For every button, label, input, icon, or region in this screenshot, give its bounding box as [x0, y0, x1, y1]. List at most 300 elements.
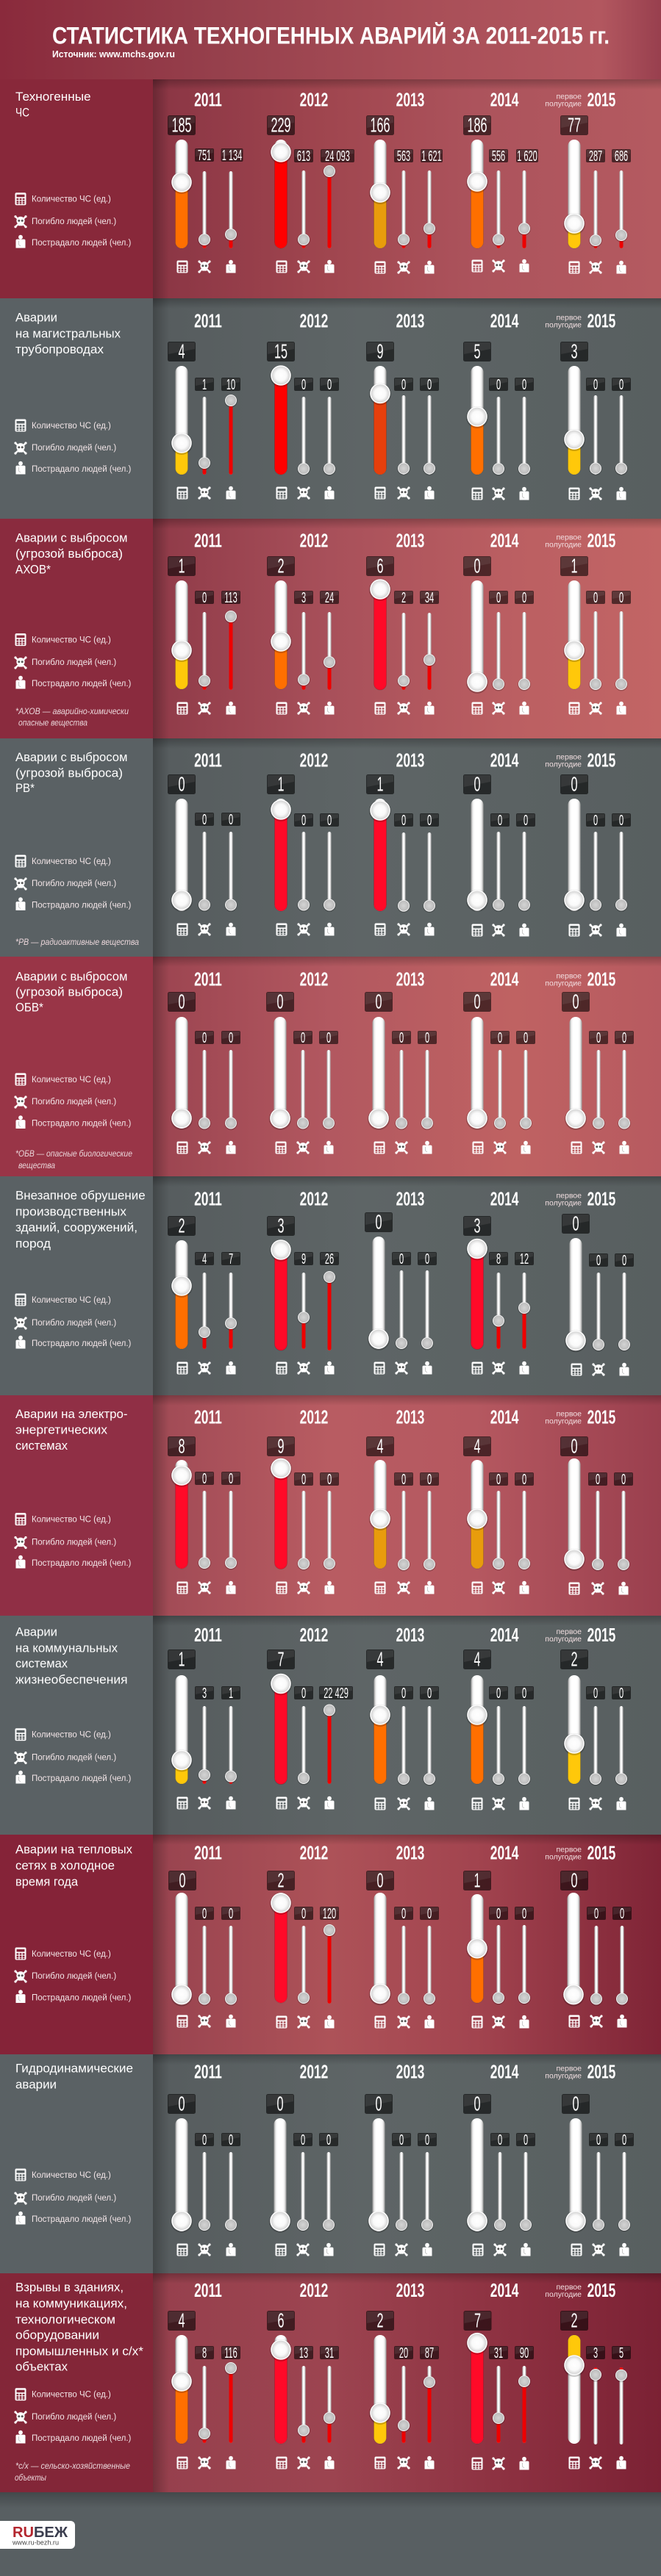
year: 2012	[300, 749, 328, 771]
count slider	[463, 1647, 491, 1784]
year: 2011	[194, 530, 222, 551]
heading	[15, 970, 128, 1014]
injured slider: 0	[522, 1685, 526, 1702]
group 2012	[267, 1625, 353, 1810]
period note: первое	[556, 1192, 582, 1201]
period note	[545, 93, 582, 109]
period note: полугодие	[545, 979, 582, 987]
count slider	[366, 1434, 394, 1569]
count slider	[168, 1434, 196, 1569]
count slider: 0	[276, 2092, 284, 2115]
year: 2013	[396, 1625, 424, 1646]
logo: RUБЕЖ	[12, 2525, 68, 2541]
icons row	[176, 260, 235, 273]
year: 2012	[300, 310, 328, 331]
panel: Взрывы в зданиях	[0, 2273, 661, 2492]
heading: энергетических	[15, 1424, 108, 1437]
period note: полугодие	[545, 760, 582, 769]
injured slider	[221, 1251, 240, 1349]
year: 2013	[396, 1842, 424, 1863]
legend: Погибло людей (чел.)	[32, 1319, 116, 1328]
group 2014	[463, 1625, 534, 1810]
icons row	[374, 2243, 432, 2256]
heading: (угрозой выброса)	[15, 986, 123, 999]
group 2013	[366, 749, 439, 936]
deaths slider: 287	[589, 148, 602, 165]
year: 2014	[490, 310, 519, 331]
heading: системах	[15, 1439, 68, 1453]
group 2015	[545, 1625, 631, 1810]
deaths slider	[195, 1030, 214, 1130]
deaths slider: 0	[202, 2132, 207, 2148]
year: 2012	[300, 1625, 328, 1646]
period note: полугодие	[545, 1199, 582, 1208]
deaths slider	[195, 2132, 214, 2232]
injured slider: 113	[224, 590, 237, 606]
year: 2013	[396, 968, 424, 990]
period note: первое	[556, 2065, 582, 2073]
deaths slider	[586, 590, 605, 691]
count slider: 2	[571, 1647, 578, 1671]
count slider: 1	[178, 1647, 185, 1671]
legend: Погибло людей (чел.)	[32, 2194, 116, 2203]
icons row	[375, 923, 434, 936]
year: 2014	[490, 1625, 519, 1646]
icons row	[472, 1797, 529, 1810]
icons row	[569, 1797, 626, 1810]
icons row	[569, 487, 626, 500]
icons row	[276, 260, 334, 273]
legend: Пострадало людей (чел.)	[32, 2434, 132, 2443]
year: 2012	[300, 530, 328, 551]
period note: полугодие	[545, 1635, 582, 1644]
deaths slider	[489, 1685, 508, 1785]
injured slider: 0	[524, 2132, 528, 2148]
injured slider: 12	[520, 1251, 529, 1267]
injured slider	[320, 590, 339, 690]
heading	[15, 90, 91, 119]
heading: (угрозой выброса)	[15, 547, 123, 561]
count slider: 0	[376, 1868, 384, 1892]
heading: РВ*	[15, 782, 35, 795]
count slider: 166	[370, 113, 390, 137]
group 2012	[267, 2280, 339, 2469]
legend: Пострадало людей (чел.)	[32, 1120, 132, 1129]
injured slider: 0	[619, 1685, 624, 1702]
injured slider: 22 429	[324, 1685, 349, 1702]
injured slider	[320, 1472, 339, 1571]
deaths slider: 3	[593, 2345, 598, 2361]
icons row	[176, 1141, 235, 1154]
count slider	[560, 339, 588, 475]
group 2015	[545, 2061, 634, 2256]
count slider: 1	[376, 772, 384, 796]
group 2013	[365, 968, 437, 1154]
panel: Аварии с выбросом РВ	[0, 738, 661, 957]
injured slider: 0	[326, 2132, 331, 2148]
panel: Аварии на магистральных трубопроводах	[0, 298, 661, 519]
year: 2014	[490, 968, 519, 990]
deaths slider	[394, 813, 413, 913]
deaths slider	[394, 1906, 413, 2006]
deaths slider	[294, 377, 313, 476]
deaths slider: 9	[301, 1251, 306, 1267]
count slider	[365, 990, 393, 1130]
group 2013	[365, 2061, 437, 2256]
heading: промышленных и с/х*	[15, 2345, 144, 2359]
count slider: 0	[178, 990, 185, 1013]
legend	[14, 419, 132, 475]
heading: Аварии	[15, 1625, 57, 1638]
year: 2011	[194, 89, 222, 110]
count slider	[463, 339, 491, 475]
count slider: 1	[474, 1868, 481, 1892]
injured slider	[612, 377, 631, 475]
group 2012	[267, 749, 339, 936]
panel: Внезапное обрушение	[0, 1176, 661, 1395]
injured slider	[420, 2345, 439, 2443]
injured slider	[615, 2132, 634, 2232]
deaths slider: 0	[498, 1030, 502, 1046]
deaths slider: 0	[594, 1906, 599, 1922]
injured slider	[319, 1030, 338, 1130]
legend: Количество ЧС (ед.)	[32, 636, 111, 645]
injured slider	[221, 1030, 240, 1130]
deaths slider	[195, 377, 214, 475]
deaths slider: 0	[301, 377, 306, 393]
count slider	[168, 1214, 196, 1349]
period note	[545, 1846, 582, 1862]
group 2015	[545, 1188, 634, 1376]
count slider	[366, 2309, 394, 2444]
deaths slider: 0	[301, 1472, 306, 1488]
deaths slider: 556	[492, 148, 505, 165]
injured slider: 0	[229, 812, 233, 828]
count slider	[267, 1214, 295, 1350]
deaths slider	[294, 1251, 313, 1349]
year: 2012	[300, 1188, 328, 1209]
year: 2012	[300, 968, 328, 990]
count slider	[168, 2092, 196, 2233]
injured slider: 0	[524, 1030, 528, 1046]
injured slider: 0	[427, 1685, 432, 1702]
injured slider	[418, 1030, 437, 1130]
injured slider: 0	[622, 1253, 626, 1269]
deaths slider: 0	[496, 1906, 501, 1922]
heading	[15, 2062, 133, 2091]
deaths slider	[489, 1906, 508, 2004]
legend: Погибло людей (чел.)	[32, 1098, 116, 1107]
injured slider	[320, 1251, 339, 1350]
count slider: 9	[376, 339, 384, 363]
year: 2015	[587, 1188, 615, 1209]
legend: Погибло людей (чел.)	[32, 1972, 116, 1981]
injured slider	[420, 590, 439, 690]
group 2013	[366, 89, 443, 274]
count slider	[267, 1434, 295, 1569]
injured slider	[612, 1906, 632, 2006]
group 2012	[267, 1188, 339, 1375]
injured slider	[320, 813, 339, 912]
year: 2012	[300, 1406, 328, 1428]
count slider: 3	[474, 1214, 481, 1237]
deaths slider	[586, 1685, 605, 1785]
injured slider: 116	[224, 2345, 237, 2361]
heading: Внезапное обрушение	[15, 1189, 146, 1202]
icons row	[176, 486, 235, 500]
deaths slider	[587, 1906, 606, 2006]
year: 2012	[300, 2061, 328, 2082]
injured slider: 0	[522, 1472, 526, 1488]
heading: оборудовании	[15, 2329, 99, 2342]
count slider: 4	[474, 1647, 481, 1671]
heading: Аварии на электро-	[15, 1408, 128, 1421]
injured slider	[420, 1472, 439, 1571]
deaths slider: 0	[593, 813, 598, 829]
year: 2012	[300, 1842, 328, 1863]
group 2015	[545, 89, 631, 274]
icons row	[375, 2456, 434, 2469]
legend	[14, 855, 132, 910]
injured slider: 0	[229, 1906, 233, 1922]
heading: зданий, сооружений,	[15, 1221, 137, 1234]
heading: Техногенные	[15, 90, 91, 104]
icons row	[176, 1796, 235, 1810]
year: 2011	[194, 2061, 222, 2082]
count slider: 1	[277, 772, 285, 796]
period note	[545, 971, 582, 987]
heading	[15, 1625, 128, 1687]
injured slider	[418, 2132, 437, 2232]
injured slider: 0	[621, 1472, 626, 1488]
injured slider: 1 134	[222, 148, 242, 164]
deaths slider	[293, 1030, 312, 1130]
injured slider: 0	[229, 1030, 233, 1046]
group 2011	[168, 2280, 240, 2469]
deaths slider: 751	[198, 148, 211, 164]
heading: сетях в холодное	[15, 1859, 115, 1872]
legend: Пострадало людей (чел.)	[32, 901, 132, 910]
period note	[545, 2065, 582, 2081]
count slider	[463, 990, 491, 1130]
injured slider: 0	[327, 377, 332, 393]
deaths slider: 0	[596, 1253, 601, 1269]
deaths slider: 0	[301, 1030, 305, 1046]
deaths slider	[195, 812, 214, 912]
deaths slider: 8	[496, 1251, 501, 1267]
group 2011	[168, 1842, 240, 2028]
icons row	[375, 1581, 434, 1594]
injured slider	[615, 1030, 634, 1130]
group 2012	[266, 2061, 338, 2256]
injured slider	[420, 1685, 439, 1785]
deaths slider: 0	[498, 813, 502, 829]
group 2013	[366, 1625, 439, 1810]
count slider: 0	[571, 1868, 578, 1892]
deaths slider: 0	[401, 1685, 406, 1702]
injured slider: 7	[229, 1251, 233, 1267]
count slider	[562, 1212, 590, 1352]
heading	[15, 532, 128, 576]
deaths slider: 0	[496, 590, 501, 606]
count slider: 0	[474, 990, 481, 1013]
year: 2015	[587, 1842, 615, 1863]
group 2011	[168, 310, 240, 500]
icons row	[176, 2456, 235, 2469]
injured slider	[612, 148, 631, 248]
count slider: 229	[271, 113, 291, 137]
legend: Пострадало людей (чел.)	[32, 1994, 132, 2003]
injured slider: 26	[325, 1251, 334, 1267]
icons row	[176, 2015, 235, 2028]
count slider	[266, 2092, 294, 2233]
deaths slider: 0	[202, 1471, 207, 1487]
count slider	[366, 113, 394, 248]
injured slider	[612, 2345, 631, 2444]
group 2013	[366, 530, 439, 715]
injured slider	[221, 590, 240, 690]
heading: системах	[15, 1658, 68, 1671]
year: 2015	[587, 1406, 615, 1428]
injured slider: 0	[522, 590, 526, 606]
year: 2013	[396, 310, 424, 331]
injured slider: 0	[619, 590, 624, 606]
group 2015	[545, 530, 631, 715]
year: 2013	[396, 89, 424, 110]
icons row	[176, 923, 235, 936]
count slider	[463, 2309, 491, 2444]
injured slider: 0	[425, 2132, 429, 2148]
injured slider	[221, 1471, 240, 1569]
deaths slider	[294, 1906, 313, 2004]
heading: Аварии с выбросом	[15, 751, 128, 764]
injured slider: 90	[520, 2345, 529, 2361]
count slider	[267, 554, 295, 689]
count slider	[266, 990, 294, 1130]
deaths slider	[195, 1251, 214, 1349]
count slider: 2	[376, 2309, 384, 2332]
count slider: 3	[571, 339, 578, 363]
deaths slider	[490, 2132, 510, 2232]
deaths slider	[586, 377, 605, 475]
count slider: 0	[474, 554, 481, 578]
count slider: 0	[474, 2092, 481, 2115]
deaths slider	[394, 1472, 413, 1571]
deaths slider	[294, 1685, 313, 1785]
deaths slider: 0	[202, 590, 207, 606]
count slider: 2	[571, 2309, 578, 2332]
injured slider: 0	[524, 813, 528, 829]
deaths slider	[195, 148, 214, 248]
period note: первое	[556, 533, 582, 542]
group 2012	[266, 968, 338, 1154]
year: 2013	[396, 2280, 424, 2301]
deaths slider	[586, 2345, 605, 2444]
count slider	[267, 1647, 295, 1784]
injured slider	[515, 1906, 534, 2004]
panel: Аварии с выбросом ОБВ	[0, 957, 661, 1176]
count slider	[366, 1868, 394, 2005]
year: 2015	[587, 89, 615, 110]
footnote: *с/х — сельско-хозяйственные	[15, 2462, 130, 2471]
count slider	[560, 554, 588, 689]
deaths slider	[394, 2345, 413, 2443]
icons row	[569, 2015, 626, 2028]
count slider	[463, 113, 491, 248]
year: 2013	[396, 530, 424, 551]
count slider: 6	[277, 2309, 285, 2332]
injured slider: 686	[615, 148, 628, 165]
icons row	[569, 1582, 628, 1595]
deaths slider	[195, 590, 214, 690]
count slider: 6	[376, 554, 384, 578]
icons row	[472, 2243, 531, 2256]
year: 2014	[490, 2280, 519, 2301]
injured slider	[515, 377, 534, 476]
deaths slider: 3	[202, 1685, 207, 1702]
year: 2014	[490, 1188, 519, 1209]
group 2013	[366, 310, 439, 500]
icons row	[472, 259, 529, 273]
deaths slider	[586, 148, 605, 248]
icons row	[276, 2456, 334, 2469]
injured slider: 0	[326, 1030, 331, 1046]
panel: Гидродинамические аварии	[0, 2054, 661, 2273]
group 2012	[267, 1842, 339, 2029]
icons row	[569, 2456, 626, 2469]
count slider: 0	[375, 990, 382, 1013]
icons row	[569, 261, 626, 274]
count slider	[562, 990, 590, 1130]
group 2012	[267, 530, 339, 715]
heading: пород	[15, 1237, 51, 1251]
period note: первое	[556, 2283, 582, 2292]
count slider	[463, 2092, 491, 2233]
count slider: 1	[571, 554, 578, 578]
period note	[545, 1409, 582, 1425]
count slider	[168, 554, 196, 689]
injured slider	[221, 2345, 240, 2443]
deaths slider: 0	[301, 813, 306, 829]
count slider: 4	[377, 1647, 384, 1671]
heading: Аварии с выбросом	[15, 532, 128, 545]
injured slider	[516, 148, 538, 248]
injured slider: 0	[427, 813, 432, 829]
deaths slider: 0	[401, 377, 406, 393]
injured slider	[221, 2132, 240, 2232]
group 2015	[545, 1842, 632, 2028]
source line: Источник: www.mchs.gov.ru	[52, 49, 175, 60]
deaths slider: 0	[399, 2132, 404, 2148]
logo: www.ru-bezh.ru	[12, 2539, 59, 2547]
deaths slider: 0	[202, 1030, 207, 1046]
heading: Аварии на тепловых	[15, 1843, 133, 1856]
deaths slider: 0	[496, 377, 501, 393]
legend	[14, 2169, 132, 2225]
icons row	[275, 1141, 334, 1154]
period note: полугодие	[545, 1853, 582, 1862]
injured slider	[515, 1472, 534, 1571]
deaths slider: 0	[596, 2132, 601, 2148]
year: 2014	[490, 2061, 519, 2082]
legend	[14, 1728, 132, 1784]
year: 2011	[194, 310, 222, 331]
group 2013	[366, 1406, 439, 1594]
injured slider: 0	[622, 1030, 626, 1046]
count slider	[366, 772, 394, 911]
deaths slider	[489, 590, 508, 691]
deaths slider	[392, 1030, 411, 1130]
